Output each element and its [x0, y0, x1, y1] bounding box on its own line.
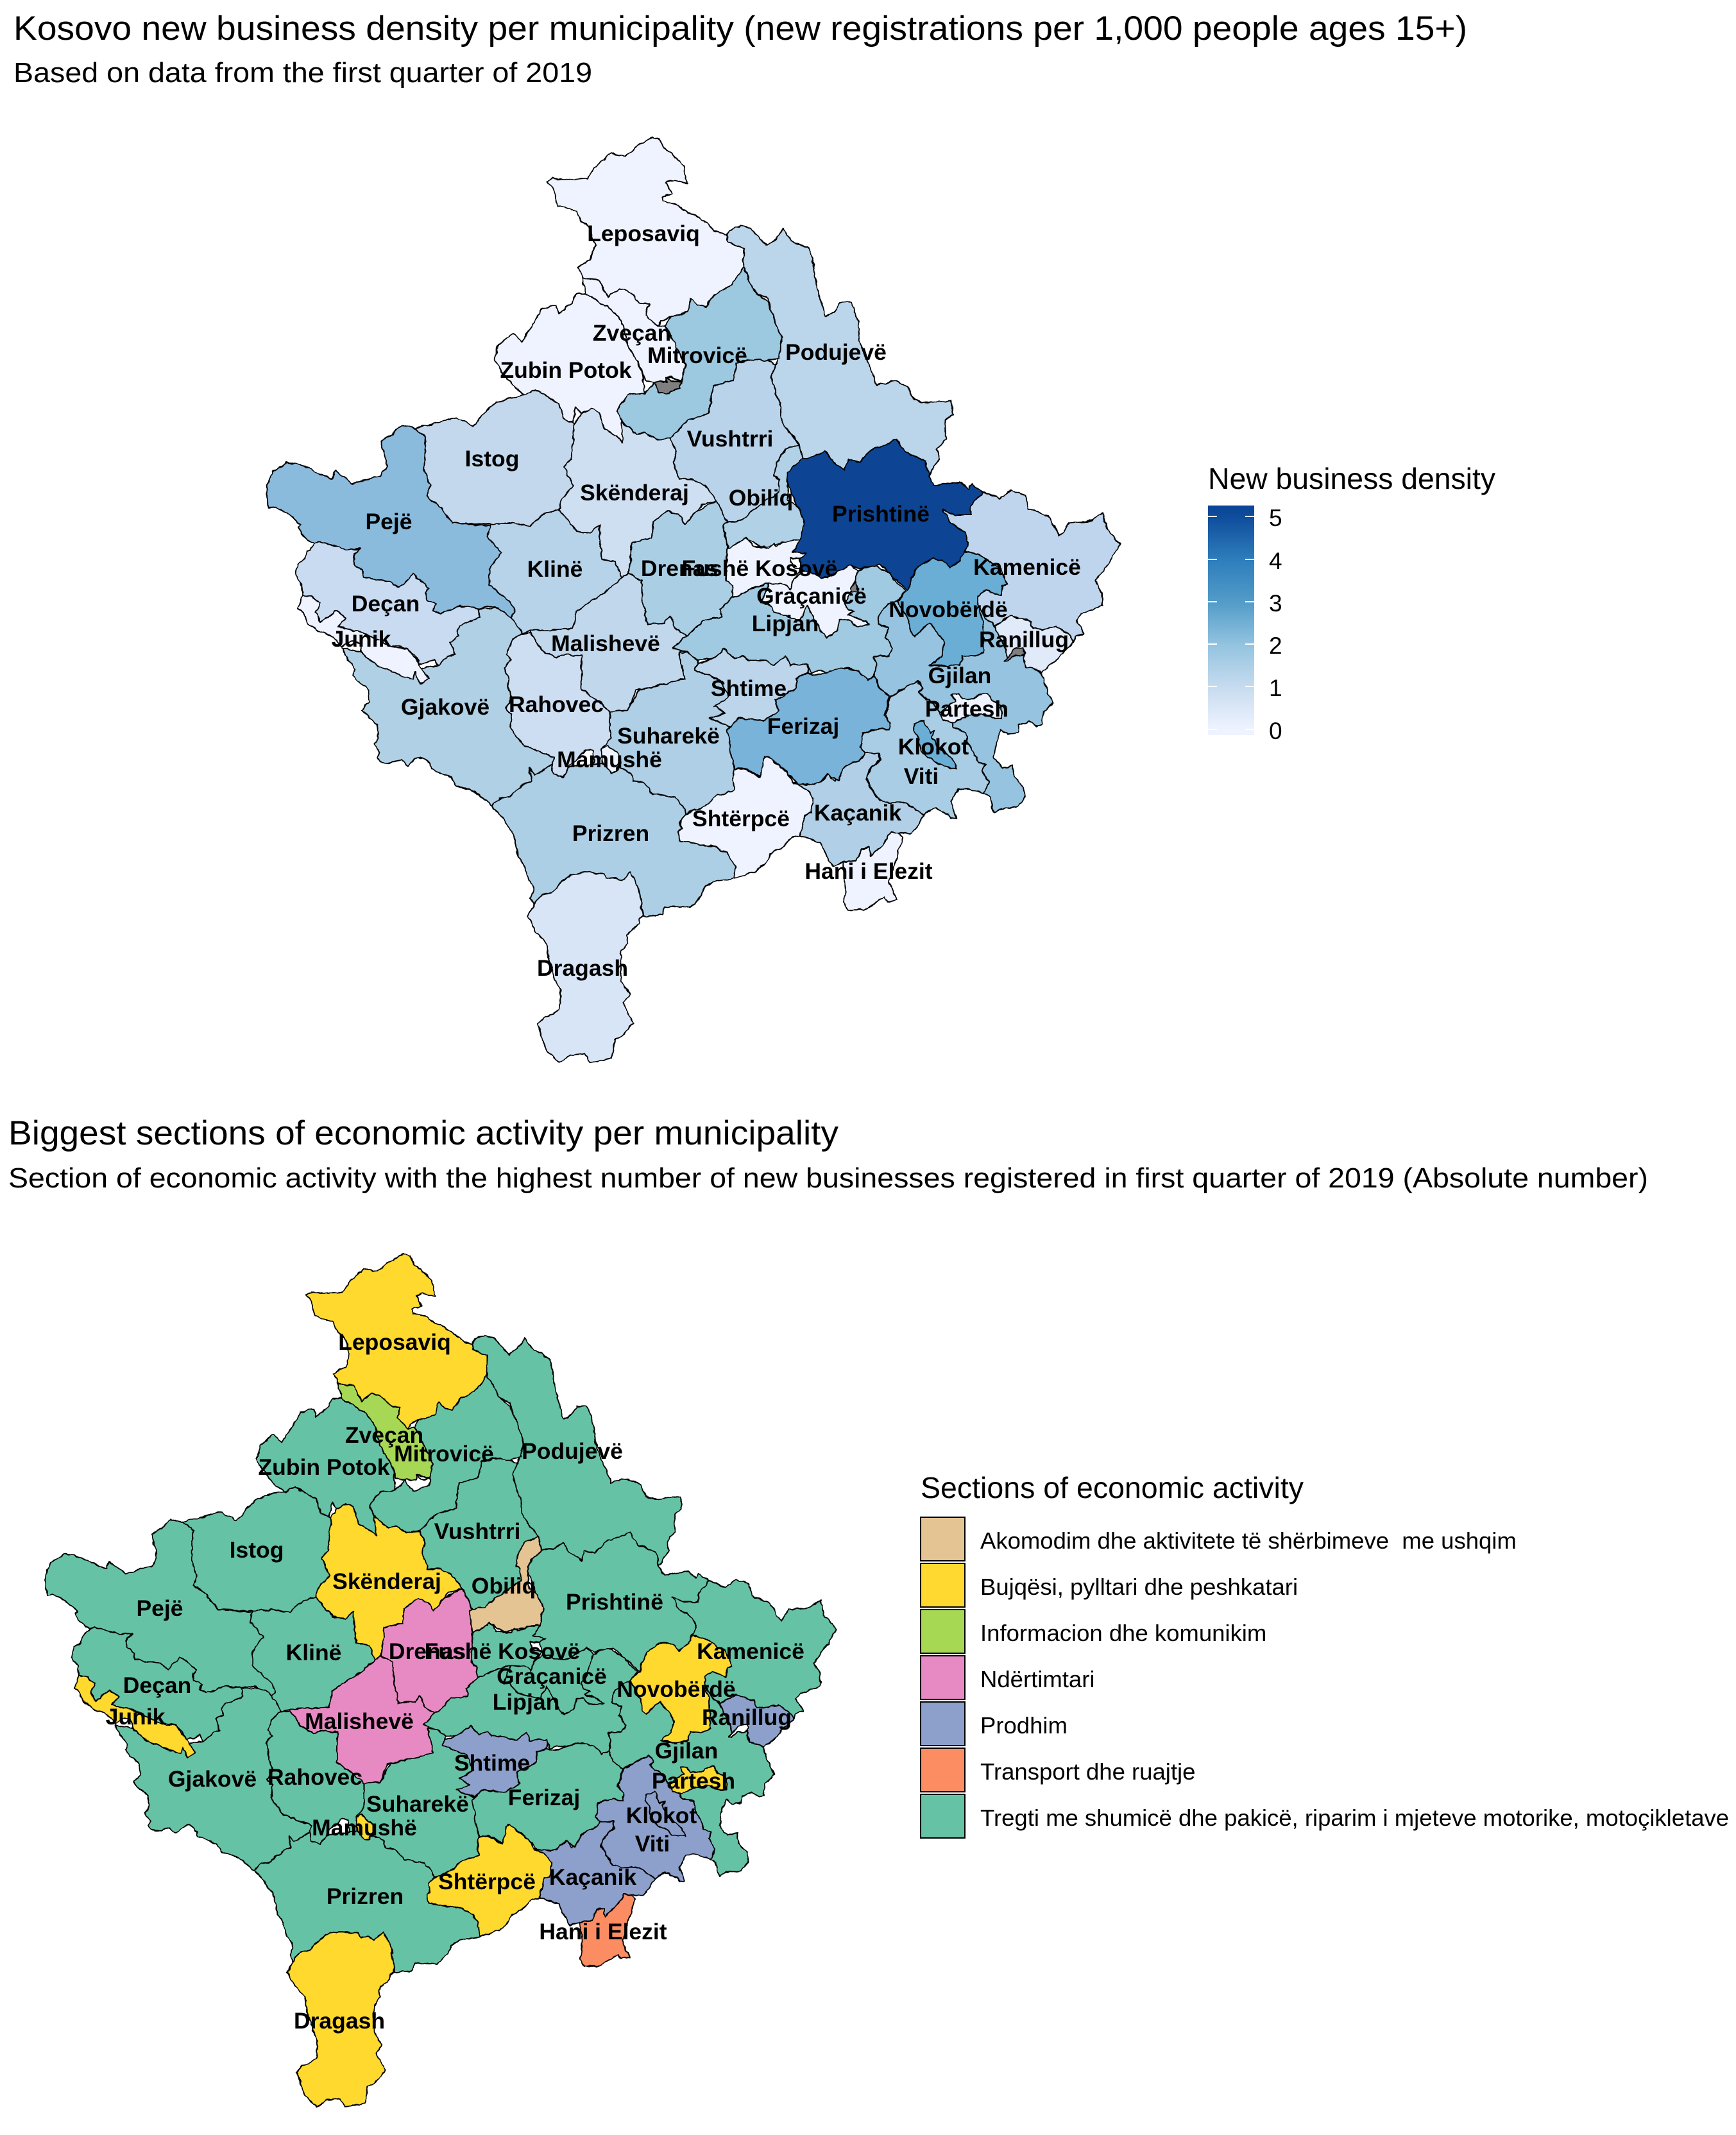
- label: Junik: Junik: [332, 626, 391, 652]
- region: Malishevë: [290, 1656, 435, 1783]
- label: Mitrovicë: Mitrovicë: [394, 1441, 494, 1467]
- label: Klinë: Klinë: [286, 1640, 341, 1665]
- label: Fushë Kosovë: Fushë Kosovë: [425, 1638, 580, 1664]
- region: Kamenicë: [942, 490, 1120, 642]
- label: Zveçan: Zveçan: [345, 1422, 423, 1448]
- label: Podujevë: Podujevë: [522, 1438, 623, 1464]
- scale numbers: 2: [1269, 633, 1282, 659]
- label: Prizren: Prizren: [572, 821, 649, 846]
- region: Graçanicë: [504, 1648, 604, 1715]
- label: Kaçanik: Kaçanik: [814, 800, 901, 826]
- legend: sections of economic activity: [921, 1471, 1729, 1838]
- region: Leposaviq: [305, 1254, 487, 1429]
- label: Zubin Potok: Zubin Potok: [500, 357, 632, 383]
- region: Suharekë: [356, 1729, 479, 1878]
- label: Klokot: Klokot: [898, 734, 969, 760]
- legend item: manufacturing: Prodhim: [980, 1712, 1068, 1739]
- scale numbers: [1269, 505, 1282, 744]
- scale numbers: 4: [1269, 548, 1282, 574]
- label: Ranillug: Ranillug: [702, 1705, 792, 1730]
- region: Klokot: [645, 1792, 685, 1836]
- region: Ferizaj: [728, 667, 890, 785]
- region: Junik: [74, 1675, 196, 1758]
- region: Viti: [595, 1755, 715, 1882]
- label: Mitrovicë: Mitrovicë: [647, 343, 747, 368]
- subtitle: map 2: Section of economic activity with the highest number of new businesses registered in first quarter of 2019 (Absolute number): [8, 1162, 1648, 1194]
- label: Drenas: Drenas: [389, 1638, 466, 1664]
- region: Prishtinë: [527, 1533, 709, 1671]
- label: Hani i Elezit: Hani i Elezit: [539, 1919, 667, 1944]
- label: Deçan: Deçan: [352, 591, 420, 617]
- legend item: manufacturing: [921, 1702, 1068, 1746]
- region: Pejë: [267, 425, 514, 617]
- label: Zubin Potok: Zubin Potok: [258, 1454, 390, 1480]
- region: Dragash: [287, 1932, 395, 2107]
- label: Dragash: Dragash: [537, 955, 628, 981]
- label: Mamushë: Mamushë: [312, 1815, 417, 1841]
- region: Partesh: [940, 693, 1001, 722]
- label: Prishtinë: Prishtinë: [566, 1589, 663, 1615]
- region: Shtime: [443, 1726, 548, 1798]
- map labels: map 1: [332, 221, 1081, 981]
- region: Klokot: [914, 720, 957, 769]
- legend item: accommodation: [921, 1517, 1517, 1561]
- label: Vushtrri: Vushtrri: [687, 426, 773, 452]
- label: Hani i Elezit: Hani i Elezit: [804, 858, 933, 884]
- legend title: Sections of economic activity: [921, 1471, 1304, 1504]
- label: Junik: Junik: [106, 1704, 166, 1730]
- scale numbers: 3: [1269, 590, 1282, 617]
- label: Kamenicë: Kamenicë: [973, 554, 1081, 580]
- no-data patch: north Mitrovicë: [654, 377, 682, 394]
- label: Shtime: Shtime: [454, 1750, 530, 1776]
- region: Klinë: [487, 510, 622, 634]
- region: Gjilan: [872, 601, 1053, 813]
- label: Podujevë: Podujevë: [785, 339, 887, 365]
- region: Obiliq: [469, 1537, 543, 1632]
- label: Shtime: Shtime: [711, 676, 787, 701]
- region: Gjakovë: [115, 1688, 311, 1871]
- region: Pejë: [46, 1519, 275, 1696]
- region: Vushtrri: [420, 1459, 540, 1610]
- region: Dragash: [528, 872, 643, 1063]
- region: Prizren: [254, 1831, 480, 1972]
- label: Obiliq: Obiliq: [472, 1573, 536, 1599]
- region: Skënderaj: [316, 1504, 463, 1660]
- region: Suharekë: [602, 652, 734, 813]
- region: Drenas: [381, 1588, 477, 1713]
- label: Pejë: Pejë: [365, 509, 413, 534]
- legend item: construction: Ndërtimtari: [980, 1666, 1094, 1692]
- region: Obiliq: [724, 445, 804, 547]
- region: Leposaviq: [547, 137, 744, 327]
- region: Rahovec: [265, 1711, 364, 1844]
- legend item: agriculture: [921, 1563, 1298, 1607]
- region: Zubin Potok: [494, 294, 645, 443]
- region: Zubin Potok: [256, 1399, 396, 1536]
- region: Kaçanik: [533, 1821, 654, 1926]
- label: Graçanicë: Graçanicë: [497, 1663, 607, 1689]
- label: Klinë: Klinë: [527, 556, 583, 582]
- region: Istog: [183, 1487, 331, 1613]
- categorical map: biggest economic sections: [46, 1254, 837, 2107]
- legend item: accommodation: Akomodim dhe aktivitete të shërbimeve me ushqim: [980, 1527, 1517, 1554]
- colour bar: [1208, 506, 1254, 735]
- label: Shtërpcë: Shtërpcë: [438, 1869, 536, 1894]
- label: Viti: Viti: [904, 763, 939, 789]
- map labels: map 2: [106, 1329, 804, 2034]
- label: Viti: Viti: [635, 1831, 670, 1857]
- label: Obiliq: Obiliq: [729, 485, 793, 511]
- gap: north Mitrovicë: [405, 1475, 430, 1490]
- region: Lipjan: [674, 565, 905, 680]
- label: Lipjan: Lipjan: [493, 1689, 559, 1715]
- region: Novobërdë: [898, 551, 1007, 667]
- label: Gjilan: Gjilan: [655, 1738, 718, 1764]
- label: Vushtrri: Vushtrri: [434, 1518, 520, 1544]
- region: Partesh: [669, 1766, 727, 1793]
- label: Leposaviq: Leposaviq: [587, 221, 700, 246]
- region: Drenas: [629, 500, 733, 635]
- label: Shtërpcë: Shtërpcë: [692, 806, 790, 831]
- region: Fushë Kosovë: [472, 1622, 546, 1678]
- label: Ferizaj: Ferizaj: [508, 1785, 580, 1810]
- label: Leposaviq: Leposaviq: [338, 1329, 451, 1355]
- label: Partesh: Partesh: [652, 1768, 735, 1794]
- label: Gjakovë: Gjakovë: [401, 694, 489, 720]
- region: Junik: [298, 594, 429, 684]
- legend item: trade: [921, 1794, 1729, 1838]
- label: Skënderaj: Skënderaj: [332, 1569, 441, 1594]
- legend item: agriculture: Bujqësi, pylltari dhe peshkatari: [980, 1574, 1298, 1600]
- region: Mamushë: [356, 1814, 373, 1840]
- legend item: trade: Tregti me shumicë dhe pakicë, riparim i mjeteve motorike, motoçikletave: [980, 1805, 1729, 1831]
- label: Skënderaj: Skënderaj: [580, 480, 689, 506]
- tick marks: [1208, 516, 1254, 729]
- label: Klokot: Klokot: [626, 1803, 697, 1828]
- region: Rahovec: [504, 633, 610, 778]
- region: Fushë Kosovë: [726, 537, 806, 598]
- region: Mitrovicë: [370, 1374, 523, 1533]
- label: Gjakovë: Gjakovë: [168, 1766, 257, 1792]
- legend title: New business density: [1208, 462, 1496, 495]
- label: Drenas: Drenas: [641, 556, 718, 581]
- label: Suharekë: Suharekë: [617, 723, 720, 749]
- region: Ranillug: [720, 1695, 794, 1748]
- legend: new business density: [1208, 462, 1496, 744]
- label: Kaçanik: Kaçanik: [549, 1864, 636, 1890]
- label: Dragash: Dragash: [294, 2008, 385, 2034]
- label: Rahovec: Rahovec: [268, 1764, 362, 1790]
- region: Istog: [416, 390, 575, 526]
- label: Zveçan: Zveçan: [593, 320, 671, 346]
- region: Graçanicë: [761, 565, 869, 637]
- region: Prishtinë: [787, 439, 983, 590]
- region: Ranillug: [994, 616, 1074, 672]
- region: Klinë: [250, 1597, 375, 1712]
- label: Partesh: Partesh: [925, 696, 1008, 722]
- region: Podujevë: [727, 226, 953, 475]
- region: Gjakovë: [343, 608, 554, 806]
- title: map 2: Biggest sections of economic activity per municipality: [8, 1114, 839, 1152]
- region: Mitrovicë: [616, 268, 782, 439]
- choropleth map: new business density: [267, 137, 1120, 1063]
- label: Istog: Istog: [230, 1537, 284, 1563]
- scale numbers: 1: [1269, 675, 1282, 701]
- gap: Ranillug: [729, 1724, 749, 1737]
- region: Skënderaj: [559, 409, 717, 577]
- legend item: transport: [921, 1748, 1195, 1792]
- label: Fushë Kosovë: Fushë Kosovë: [682, 556, 837, 581]
- legend item: construction: [921, 1656, 1094, 1699]
- label: Rahovec: Rahovec: [509, 692, 604, 717]
- label: Prizren: Prizren: [327, 1884, 404, 1909]
- region: Kaçanik: [793, 753, 924, 866]
- region: Podujevë: [472, 1336, 681, 1566]
- label: Novobërdë: Novobërdë: [889, 597, 1008, 622]
- no-data patch: Graçanicë: [851, 582, 858, 592]
- region: Lipjan: [422, 1648, 638, 1755]
- region: Mamushë: [602, 745, 620, 773]
- region: Novobërdë: [630, 1635, 732, 1742]
- label: Novobërdë: Novobërdë: [617, 1676, 736, 1702]
- label: Malishevë: Malishevë: [551, 631, 660, 656]
- legend item: information: Informacion dhe komunikim: [980, 1620, 1266, 1646]
- label: Malishevë: Malishevë: [305, 1708, 414, 1734]
- label: Suharekë: Suharekë: [366, 1791, 469, 1817]
- subtitle: map 1: Based on data from the first quarter of 2019: [13, 57, 592, 89]
- no-data patch: Ranillug: [1004, 647, 1025, 661]
- region: Vushtrri: [670, 359, 799, 523]
- region: Zveçan: [582, 278, 685, 382]
- label: Deçan: Deçan: [123, 1672, 191, 1698]
- label: Ferizaj: Ferizaj: [767, 713, 839, 739]
- scale numbers: 5: [1269, 505, 1282, 531]
- region: Gjilan: [608, 1681, 774, 1876]
- label: Kamenicë: Kamenicë: [697, 1638, 804, 1664]
- region: Kamenicë: [672, 1579, 837, 1720]
- label: Istog: Istog: [465, 446, 519, 472]
- region: Shtime: [695, 649, 808, 727]
- region: Shtërpcë: [427, 1825, 552, 1937]
- region: Hani i Elezit: [844, 832, 903, 910]
- label: Lipjan: Lipjan: [752, 611, 819, 636]
- region: Hani i Elezit: [580, 1894, 635, 1966]
- region: Malishevë: [530, 574, 686, 711]
- label: Graçanicë: Graçanicë: [756, 583, 867, 609]
- region: Deçan: [72, 1627, 243, 1741]
- region: Shtërpcë: [678, 756, 813, 879]
- scale numbers: 0: [1269, 718, 1282, 744]
- region: Ferizaj: [472, 1742, 624, 1851]
- label: Ranillug: Ranillug: [979, 627, 1069, 652]
- label: Pejë: Pejë: [136, 1595, 183, 1621]
- region: Prizren: [492, 763, 735, 916]
- title: map 1: Kosovo new business density per municipality (new registrations per 1,000 people ages 15+): [13, 10, 1467, 47]
- label: Mamushë: Mamushë: [557, 747, 662, 772]
- region: Viti: [860, 681, 989, 819]
- label: Prishtinë: Prishtinë: [832, 501, 930, 527]
- label: Gjilan: Gjilan: [928, 663, 991, 688]
- region: Zveçan: [337, 1383, 433, 1480]
- region: Deçan: [295, 542, 480, 666]
- legend item: information: [921, 1610, 1266, 1653]
- legend item: transport: Transport dhe ruajtje: [980, 1758, 1195, 1785]
